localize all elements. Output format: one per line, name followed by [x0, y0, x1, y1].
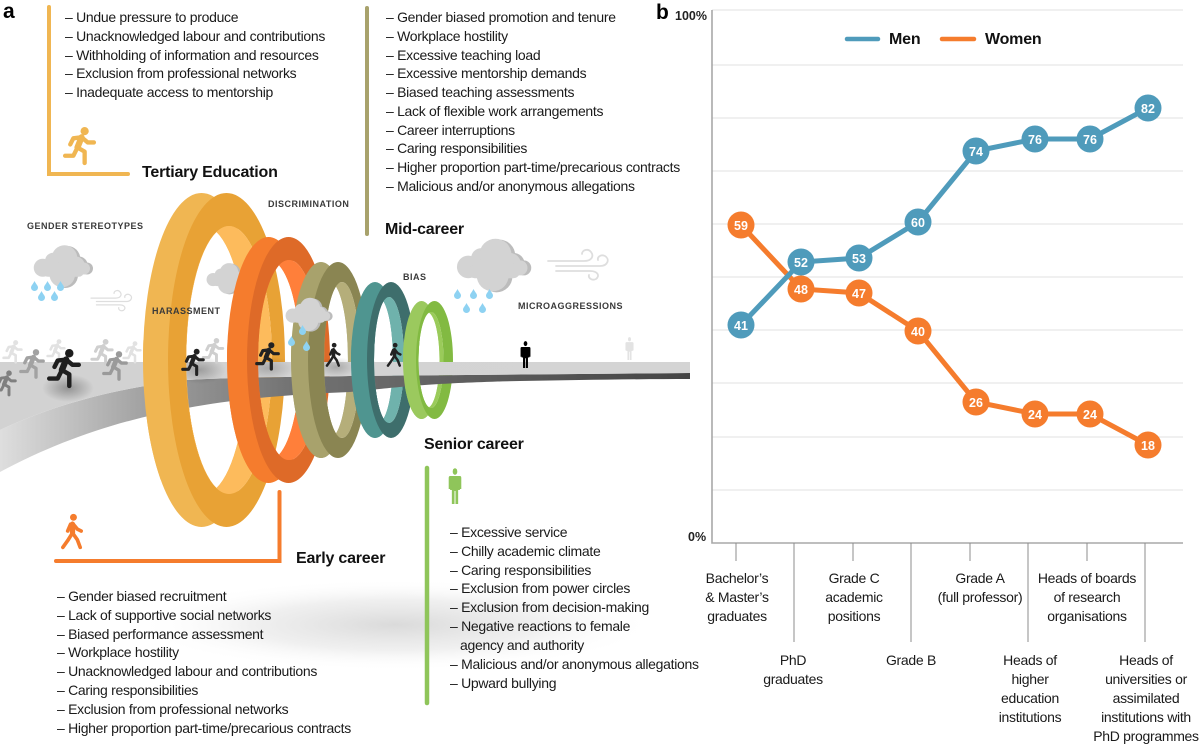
x labels: institutions with [1101, 709, 1191, 725]
list: mid-career: – Biased teaching assessments [386, 84, 574, 100]
list: tertiary education: – Withholding of information and resources [65, 47, 319, 63]
label: gender stereotypes: GENDER STEREOTYPES [27, 221, 144, 231]
list: senior career: – Excessive service [450, 524, 568, 540]
line: women: 40 [911, 325, 925, 339]
list: early career: – Higher proportion part-time/precarious contracts [57, 720, 351, 736]
list: tertiary education: – Inadequate access to mentorship [65, 84, 274, 100]
legend [847, 31, 1042, 48]
heading: mid-career: Mid-career [385, 221, 464, 238]
list: senior career: – Negative reactions to female [450, 618, 631, 634]
icon: orange walker [63, 514, 81, 547]
line: men: 76 [1028, 133, 1042, 147]
bracket: mid-career [365, 8, 369, 234]
cloud behind early-career ring [207, 263, 250, 294]
x labels: Grade A [955, 570, 1006, 586]
y label 100%: 100% [675, 9, 707, 23]
wind gust left [91, 291, 131, 311]
line: men: 60 [911, 216, 925, 230]
icon: green standing figure [449, 468, 461, 504]
line: women: 18 [1141, 439, 1155, 453]
x labels: universities or [1105, 671, 1188, 687]
heading: early career: Early career [296, 550, 385, 567]
list: mid-career: – Lack of flexible work arrangements [386, 103, 603, 119]
y label 0%: 0% [688, 530, 706, 544]
line: women: 26 [969, 396, 983, 410]
runners on the road [0, 337, 634, 395]
list: senior career: – Exclusion from decision-making [450, 599, 649, 615]
x labels [705, 570, 1199, 744]
line: women: 48 [794, 283, 808, 297]
list: tertiary education: – Exclusion from professional networks [65, 65, 297, 81]
cloud: gender stereotypes [31, 245, 93, 301]
x labels: PhD [780, 652, 806, 668]
line: men: 53 [852, 252, 866, 266]
x labels: graduates [763, 671, 823, 687]
x labels: assimilated [1113, 690, 1179, 706]
x labels: Heads of boards [1038, 570, 1136, 586]
line: women [728, 212, 1162, 458]
cloud: over the olive ring [286, 298, 333, 351]
list: early career: – Lack of supportive social networks [57, 607, 271, 623]
legend: Women [985, 31, 1042, 48]
list: mid-career: – Career interruptions [386, 122, 515, 138]
floor shadow [135, 579, 655, 671]
wind gust right [548, 250, 608, 280]
label: discrimination: DISCRIMINATION [268, 199, 349, 209]
x ticks [736, 543, 1145, 642]
list: early career: – Gender biased recruitment [57, 588, 227, 604]
panel label b: b [656, 1, 669, 24]
x labels: graduates [707, 608, 767, 624]
x labels: academic [825, 589, 883, 605]
x labels: PhD programmes [1093, 728, 1199, 744]
list: mid-career: – Excessive mentorship demands [386, 65, 587, 81]
road [0, 362, 690, 472]
bracket: senior career [425, 468, 429, 703]
list: early career: – Unacknowledged labour and contributions [57, 663, 317, 679]
x labels: Grade C [829, 570, 880, 586]
list: senior career: – Chilly academic climate [450, 543, 601, 559]
ring: mid-career [291, 262, 368, 458]
panel label a: a [3, 0, 15, 23]
x labels: Heads of [1119, 652, 1173, 668]
bracket: tertiary education [49, 7, 128, 174]
line: men: 76 [1083, 133, 1097, 147]
line: women: 24 [1028, 408, 1042, 422]
chart: gender share by career stage [675, 9, 1199, 744]
line: men [728, 94, 1162, 338]
x labels: positions [828, 608, 881, 624]
list: senior career: agency and authority [460, 637, 584, 653]
x labels: education [1001, 690, 1059, 706]
list: senior career: – Upward bullying [450, 675, 556, 691]
x labels: of research [1054, 589, 1120, 605]
axis [712, 10, 1183, 543]
bracket: early career [56, 492, 280, 561]
line: men: 41 [734, 319, 748, 333]
chart grid [712, 10, 1183, 490]
list: early career: – Workplace hostility [57, 644, 179, 660]
line: women: 47 [852, 287, 866, 301]
list: senior career: – Exclusion from power circles [450, 580, 630, 596]
line: men: 74 [969, 145, 983, 159]
ring: senior career [403, 301, 453, 419]
list: early career: – Caring responsibilities [57, 682, 198, 698]
ring: early career [227, 237, 330, 483]
list: senior career: – Malicious and/or anonymous allegations [450, 656, 699, 672]
label: microaggressions: MICROAGGRESSIONS [518, 301, 623, 311]
heading: senior career: Senior career [424, 436, 524, 453]
x labels: & Master’s [705, 589, 769, 605]
x labels: Bachelor’s [706, 570, 769, 586]
list: senior career: – Caring responsibilities [450, 562, 591, 578]
line: women: 59 [734, 219, 748, 233]
x labels: organisations [1047, 608, 1127, 624]
list: mid-career: – Workplace hostility [386, 28, 508, 44]
x labels: (full professor) [938, 589, 1022, 605]
list: mid-career: – Excessive teaching load [386, 47, 540, 63]
icon: yellow runner [65, 127, 94, 163]
list: mid-career: – Malicious and/or anonymous allegations [386, 178, 635, 194]
list: early career: – Exclusion from professional networks [57, 701, 289, 717]
label: harassment: HARASSMENT [152, 306, 221, 316]
legend: Men [889, 31, 920, 48]
cloud: large right [454, 239, 531, 313]
ring: teal [351, 282, 415, 438]
x labels: higher [1011, 671, 1049, 687]
line: women: 24 [1083, 408, 1097, 422]
heading: tertiary education: Tertiary Education [142, 164, 278, 181]
ring: tertiary education [143, 193, 285, 527]
list: early career: – Biased performance assessment [57, 626, 264, 642]
runner shadows [42, 356, 356, 402]
list: tertiary education: – Unacknowledged labour and contributions [65, 28, 325, 44]
list: mid-career: – Gender biased promotion and tenure [386, 9, 616, 25]
list: tertiary education: – Undue pressure to produce [65, 9, 239, 25]
x labels: institutions [999, 709, 1062, 725]
x labels: Heads of [1003, 652, 1057, 668]
line: men: 52 [794, 256, 808, 270]
list: mid-career: – Caring responsibilities [386, 140, 527, 156]
x labels: Grade B [886, 652, 936, 668]
list: mid-career: – Higher proportion part-time/precarious contracts [386, 159, 680, 175]
label: bias: BIAS [403, 272, 427, 282]
line: men: 82 [1141, 102, 1155, 116]
